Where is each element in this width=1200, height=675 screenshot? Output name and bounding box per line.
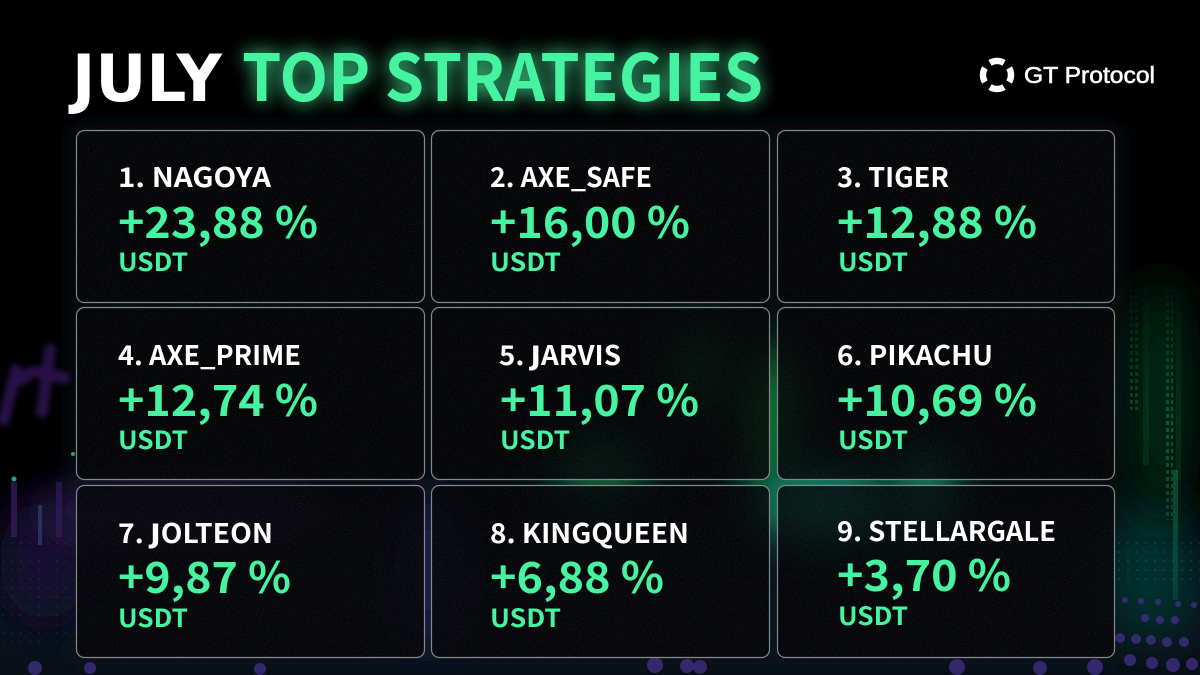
title: TOP STRATEGIES (242, 26, 763, 120)
card 1: NAGOYA (76, 130, 424, 302)
card 8: KINGQUEEN: +6,88 % (490, 544, 664, 606)
card 4: AXE_PRIME: 4. AXE_PRIME (118, 334, 301, 373)
card 5: JARVIS: +11,07 % (500, 367, 699, 429)
card 7: JOLTEON: 7. JOLTEON (118, 512, 273, 551)
card 6: PIKACHU: 6. PIKACHU (837, 334, 993, 373)
card 4: AXE_PRIME (76, 308, 424, 480)
card 2: AXE_SAFE: USDT (490, 243, 561, 279)
title: JULY (68, 42, 223, 117)
card 8: KINGQUEEN (432, 486, 770, 658)
card 3: TIGER: USDT (838, 243, 908, 279)
card 6: PIKACHU: +10,69 % (837, 367, 1037, 429)
card 9: STELLARGALE: +3,70 % (837, 542, 1011, 604)
card 1: NAGOYA: +23,88 % (118, 189, 318, 251)
card 8: KINGQUEEN: USDT (490, 599, 561, 635)
card 3: TIGER: 3. TIGER (837, 156, 949, 195)
card 1: NAGOYA: USDT (118, 243, 188, 279)
card 2: AXE_SAFE (432, 130, 770, 302)
logo: GT Protocol: GT Protocol (1024, 62, 1155, 88)
card 9: STELLARGALE (778, 486, 1114, 658)
card 2: AXE_SAFE: 2. AXE_SAFE (490, 156, 652, 195)
card 7: JOLTEON: +9,87 % (118, 544, 291, 606)
card 8: KINGQUEEN: 8. KINGQUEEN (490, 512, 689, 551)
card 4: AXE_PRIME: +12,74 % (118, 367, 318, 429)
card backdrop with grain texture (76, 130, 1115, 658)
card 5: JARVIS (432, 308, 770, 480)
card 6: PIKACHU (778, 308, 1114, 480)
card 2: AXE_SAFE: +16,00 % (490, 189, 690, 251)
card 9: STELLARGALE: 9. STELLARGALE (837, 510, 1056, 549)
card 3: TIGER: +12,88 % (837, 189, 1037, 251)
card 9: STELLARGALE: USDT (838, 597, 908, 633)
card 5: JARVIS: 5. JARVIS (499, 334, 621, 373)
card 1: NAGOYA: 1. NAGOYA (118, 156, 272, 195)
card 4: AXE_PRIME: USDT (118, 421, 188, 457)
card 6: PIKACHU: USDT (838, 421, 908, 457)
icon: segmented ring (983, 61, 1011, 89)
card 7: JOLTEON: USDT (118, 599, 188, 635)
logo: GT Protocol (983, 61, 1155, 89)
card 5: JARVIS: USDT (500, 421, 570, 457)
card 3: TIGER (778, 130, 1114, 302)
card 7: JOLTEON (76, 486, 424, 658)
